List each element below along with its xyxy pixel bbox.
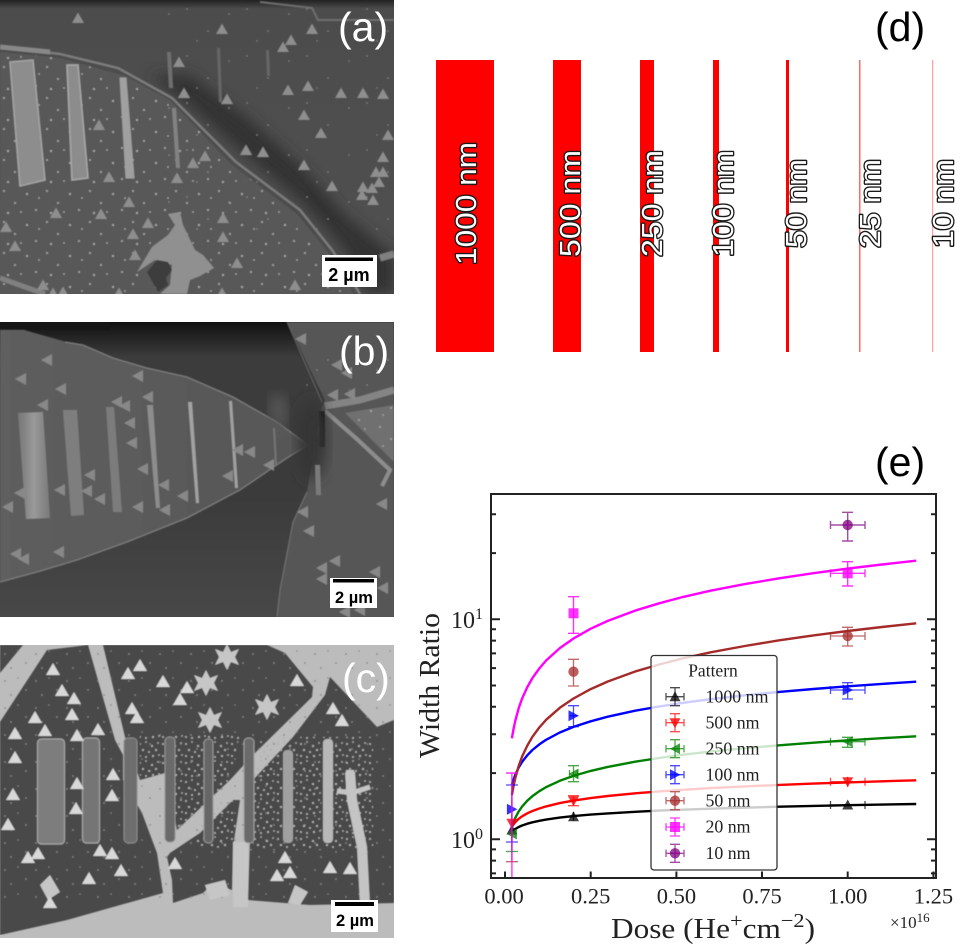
legend entry: 10 nm — [666, 843, 751, 863]
scale bar (a) — [322, 255, 377, 287]
milled stripes — [18, 412, 50, 519]
label (d): (d) — [875, 4, 925, 50]
legend entry: 1000 nm — [666, 686, 769, 706]
data points: 20 nm — [506, 562, 865, 878]
scale bar (b): 2 µm — [335, 589, 373, 607]
axis offset: 16 — [917, 910, 930, 925]
plot frame — [491, 494, 936, 878]
bar: 100 nm — [708, 60, 740, 352]
chart: (e) width ratio vs dose — [415, 494, 953, 945]
legend entry: 500 nm: 500 nm — [706, 712, 760, 732]
legend entry: 500 nm — [666, 712, 760, 732]
y tick labels: 10 — [451, 828, 475, 854]
axis ticks — [491, 514, 936, 878]
triangular islands — [6, 18, 388, 293]
legend entry: 50 nm: 50 nm — [706, 790, 751, 810]
panel: (d) line width pattern — [436, 60, 960, 352]
bar: 1000 nm — [436, 60, 494, 352]
x tick labels — [484, 884, 953, 908]
data points: 500 nm — [506, 777, 865, 833]
x tick labels: 0.25 — [571, 884, 610, 908]
bar: 50 nm: 50 nm — [781, 159, 813, 248]
flake outline — [0, 342, 308, 582]
legend title: Pattern — [688, 660, 738, 680]
legend entry: 20 nm: 20 nm — [706, 817, 751, 837]
fit curves — [512, 561, 916, 832]
x axis title: ) — [805, 914, 815, 945]
flake edge — [50, 51, 362, 294]
legend entry: 10 nm: 10 nm — [706, 843, 751, 863]
label (c): (c) — [342, 655, 390, 701]
triangular islands — [8, 339, 383, 612]
legend entry: 50 nm — [666, 790, 751, 810]
legend entry: 250 nm: 250 nm — [706, 738, 760, 758]
x axis title: −2 — [781, 910, 805, 932]
panel: (c) helium ion image with milled pattern — [0, 644, 394, 938]
x tick labels: 0.00 — [484, 884, 524, 908]
label (b): (b) — [339, 328, 389, 374]
scale bar (c) — [331, 900, 378, 932]
bright bands and star islands — [40, 644, 308, 907]
x tick labels: 1.00 — [828, 884, 867, 908]
milled stripes — [38, 738, 100, 844]
label (e): (e) — [875, 439, 925, 485]
x axis title: cm — [743, 914, 781, 945]
y tick labels: 10 — [451, 608, 475, 634]
bar: 250 nm — [637, 60, 669, 352]
dotted regions — [0, 645, 394, 905]
bar: 500 nm — [553, 60, 587, 352]
x axis title: + — [730, 910, 743, 932]
x tick labels: 0.75 — [742, 884, 782, 908]
bar: 25 nm: 25 nm — [855, 159, 887, 248]
bar: 1000 nm: 1000 nm — [451, 142, 483, 265]
dark flake regions — [0, 645, 394, 935]
central triangular flake — [0, 325, 308, 582]
data points: 10 nm — [830, 512, 865, 541]
bar: 50 nm — [781, 60, 813, 352]
legend — [651, 656, 777, 870]
irregular bright blob — [137, 212, 214, 294]
scale bar (c): 2 µm — [336, 912, 374, 930]
y tick labels — [451, 606, 483, 854]
scale bar (b) — [330, 578, 377, 608]
scale bar (a): 2 µm — [328, 265, 370, 285]
triangular etched islands — [8, 665, 350, 902]
legend entry: 250 nm — [666, 738, 760, 758]
plot contents — [506, 512, 916, 878]
milled stripes — [10, 60, 45, 186]
panel: (a) SEM image before milling — [0, 0, 394, 294]
x axis title: Dose (He — [611, 914, 718, 945]
label (a): (a) — [338, 4, 388, 50]
data points: 1000 nm — [506, 800, 865, 834]
panel: (b) SEM image after helium milling — [0, 322, 394, 617]
data points: 250 nm — [506, 736, 865, 852]
y tick labels: 1 — [475, 606, 483, 623]
right-hand substrate flakes — [277, 322, 394, 617]
legend entry: 100 nm: 100 nm — [706, 764, 760, 784]
bar: 10 nm: 10 nm — [928, 159, 960, 248]
data points: 100 nm — [506, 683, 865, 842]
axis offset: ×10 — [890, 913, 917, 932]
bar: 100 nm: 100 nm — [708, 150, 740, 257]
legend entry: 20 nm — [666, 817, 751, 837]
data points: 50 nm — [506, 627, 865, 862]
bar: 500 nm: 500 nm — [555, 150, 587, 257]
y axis title: Width Ratio — [415, 613, 446, 758]
bar: 250 nm: 250 nm — [637, 150, 669, 257]
legend entry: 100 nm — [666, 764, 760, 784]
dark fold — [319, 411, 325, 447]
x tick labels: 1.25 — [914, 884, 953, 908]
legend entry: 1000 nm: 1000 nm — [706, 686, 769, 706]
y tick labels: 0 — [475, 826, 483, 843]
x tick labels: 0.50 — [657, 884, 696, 908]
flake shadow along edge — [150, 75, 394, 294]
lower-left flake — [0, 52, 353, 294]
